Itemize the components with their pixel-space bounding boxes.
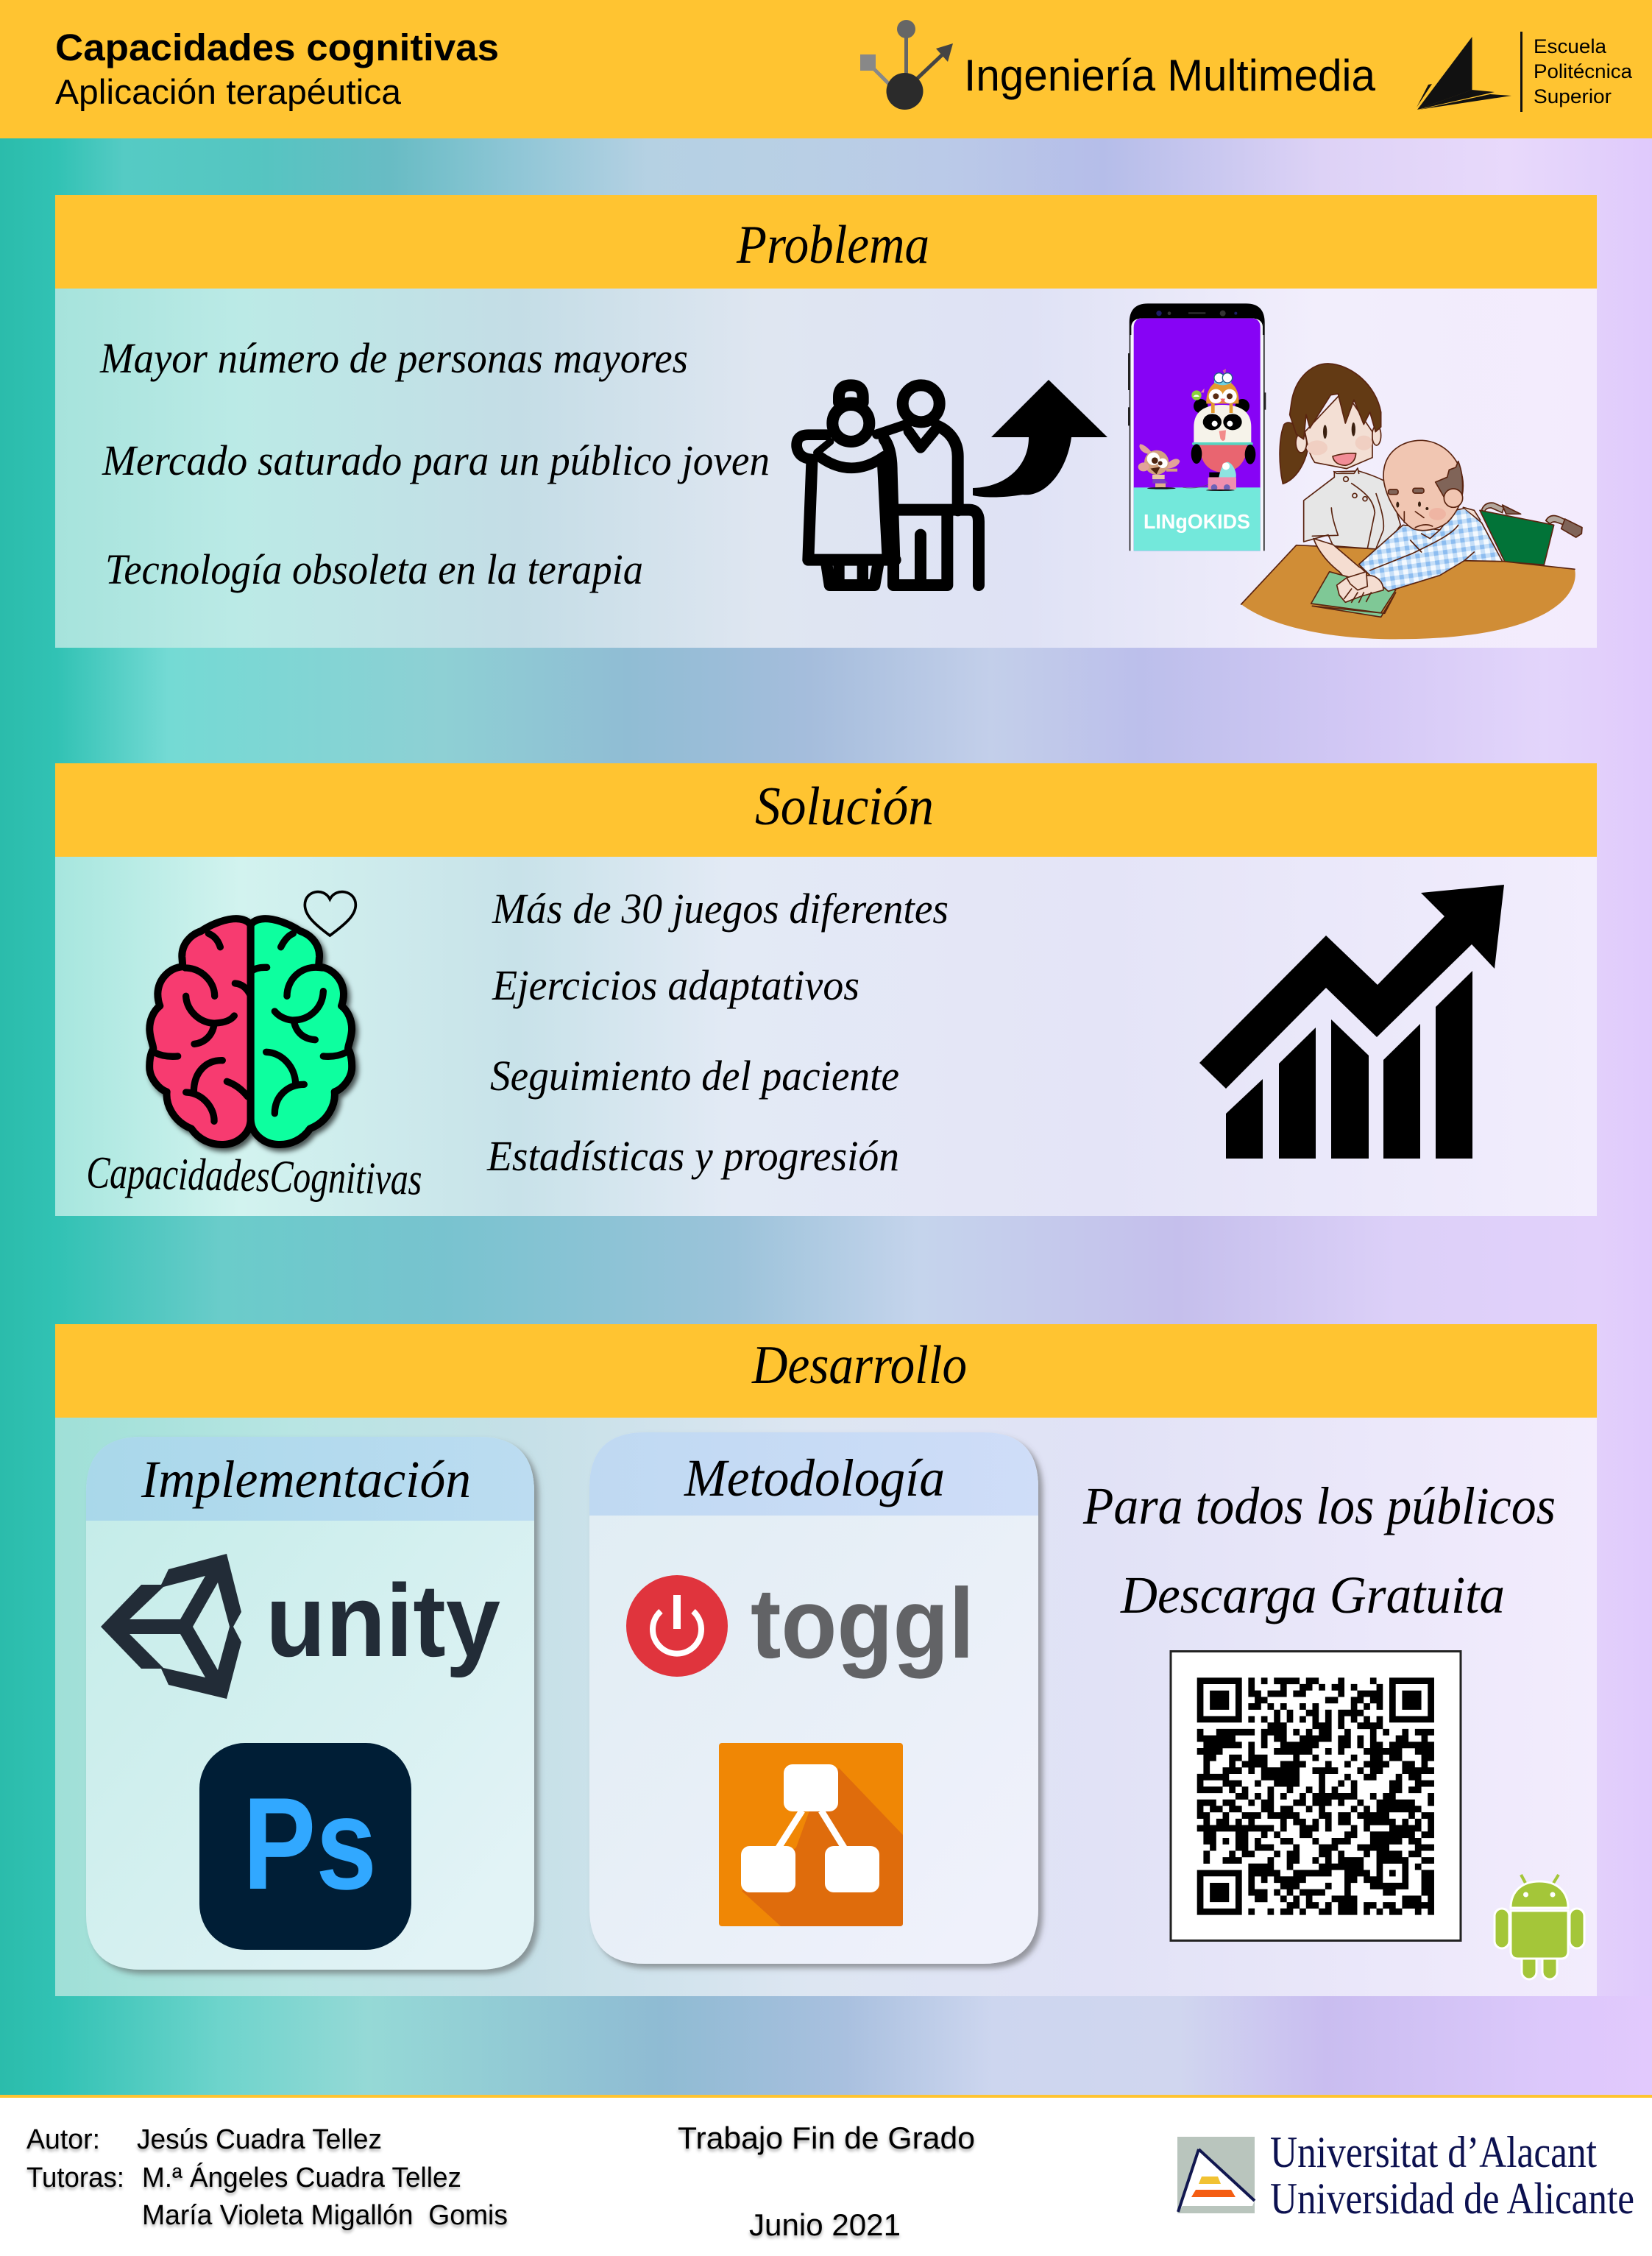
- logo: photoshop: Ps: [243, 1770, 377, 1917]
- credits: Jesús Cuadra Tellez: [137, 2124, 382, 2155]
- footer: [0, 2095, 1652, 2256]
- header bar: [0, 0, 1652, 138]
- school name: Superior: [1534, 85, 1612, 107]
- panda character: [1191, 399, 1255, 478]
- card: implementacion: [86, 1437, 534, 1970]
- degree project and date: Junio 2021: [749, 2207, 901, 2242]
- solution list: Seguimiento del paciente: [490, 1052, 899, 1100]
- school name: Escuela: [1534, 35, 1607, 57]
- card heading: Implementación: [141, 1450, 471, 1509]
- download text: Para todos los públicos: [1082, 1477, 1556, 1535]
- ponytail: [1280, 422, 1308, 484]
- cart with blue bird: [1183, 462, 1236, 491]
- problem list: Tecnología obsoleta en la terapia: [105, 545, 643, 593]
- school name: Politécnica: [1534, 60, 1633, 82]
- logo text: lingokids: LINgOKIDS: [1144, 510, 1250, 533]
- brown calf character: [1138, 444, 1180, 489]
- icon: EPS sail logo: [1417, 37, 1511, 110]
- nurse arm: [1314, 539, 1368, 591]
- icon: elderly couple: [797, 385, 979, 585]
- icon: android: [1495, 1875, 1584, 1979]
- credits: M.ª Ángeles Cuadra Tellez: [142, 2162, 461, 2193]
- solution list: Estadísticas y progresión: [486, 1132, 899, 1180]
- uniform: [1304, 471, 1400, 550]
- orange character: [1206, 381, 1239, 413]
- logo: unity: [101, 1554, 500, 1699]
- heading: problema: Problema: [736, 215, 929, 275]
- logo text: CapacidadesCognitivas: [86, 1148, 422, 1205]
- credits: [26, 2124, 508, 2231]
- wheelchair: [1481, 503, 1503, 513]
- logo: universidad de alicante: [1177, 2137, 1255, 2213]
- nurse face: [1296, 433, 1307, 453]
- solution list: [486, 885, 949, 1180]
- panel: solucion: [55, 763, 1597, 1216]
- icon: upward arrow: [973, 380, 1107, 498]
- icon: multimedia engineering logo: [860, 20, 953, 110]
- panel: desarrollo: [55, 1324, 1597, 1996]
- university name: [1270, 2128, 1634, 2223]
- logo: photoshop: [199, 1743, 411, 1950]
- download text: Descarga Gratuita: [1120, 1566, 1505, 1624]
- icon: phone with lingokids app: [1128, 303, 1266, 551]
- credits: Autor:: [26, 2124, 100, 2155]
- problem list: [99, 334, 770, 593]
- card heading: Metodología: [684, 1449, 945, 1507]
- table: [1241, 545, 1575, 639]
- degree project and date: [678, 2121, 975, 2242]
- heading: desarrollo: Desarrollo: [751, 1335, 967, 1396]
- title: Capacidades cognitivas: [55, 26, 499, 68]
- degree name: Ingeniería Multimedia: [964, 51, 1376, 100]
- credits: Tutoras:: [26, 2163, 124, 2193]
- icon: heart: [305, 892, 355, 936]
- patient head: [1383, 440, 1463, 531]
- logo: toggl: [626, 1568, 974, 1679]
- heading: solucion: Solución: [755, 777, 934, 837]
- qr code: [1171, 1652, 1461, 1940]
- subtitle: Aplicación terapéutica: [55, 72, 402, 111]
- credits: María Violeta Migallón Gomis: [142, 2200, 508, 2231]
- degree project and date: Trabajo Fin de Grado: [678, 2121, 975, 2155]
- panel: problema: [55, 195, 1597, 648]
- problem list: Mayor número de personas mayores: [99, 334, 688, 382]
- icon: growth chart: [1199, 885, 1504, 1159]
- problem list: Mercado saturado para un público joven: [102, 436, 770, 484]
- logo: draw.io: [719, 1743, 903, 1926]
- university name: Universitat d’Alacant: [1270, 2128, 1597, 2177]
- solution list: Más de 30 juegos diferentes: [492, 885, 949, 933]
- download text: [1082, 1477, 1556, 1624]
- solution list: Ejercicios adaptativos: [492, 961, 859, 1009]
- hands: [1337, 576, 1383, 602]
- icon: brain logo: [149, 919, 352, 1145]
- illustration: therapist and patient: [1241, 364, 1582, 639]
- book: [1312, 593, 1396, 617]
- patient shirt: [1359, 509, 1503, 591]
- logo: unity: unity: [266, 1563, 500, 1678]
- logo: toggl: toggl: [751, 1568, 974, 1679]
- small birds: [1191, 369, 1233, 400]
- school name: [1534, 35, 1633, 107]
- card: metodologia: [589, 1432, 1038, 1964]
